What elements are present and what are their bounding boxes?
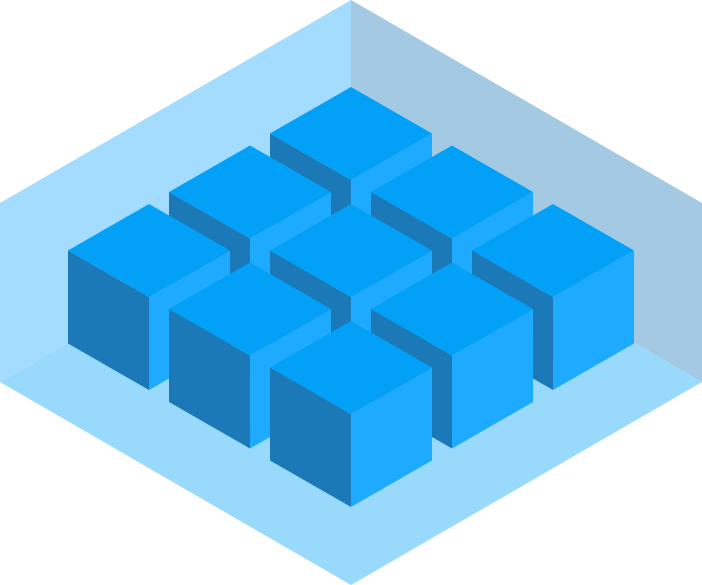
cube: front bbox=[270, 321, 432, 507]
cube: middle row right bbox=[472, 204, 634, 390]
cube: middle row left bbox=[68, 204, 230, 390]
cube: fourth row left bbox=[169, 262, 331, 448]
right wall bbox=[351, 0, 702, 382]
cube: middle row centre bbox=[270, 204, 432, 390]
floor bbox=[0, 179, 702, 585]
cube grid bbox=[68, 87, 634, 507]
cube: second row left bbox=[169, 146, 331, 332]
left wall bbox=[0, 0, 351, 382]
cube: second row right bbox=[371, 146, 533, 332]
cube: back bbox=[270, 87, 432, 273]
cube: fourth row right bbox=[371, 262, 533, 448]
